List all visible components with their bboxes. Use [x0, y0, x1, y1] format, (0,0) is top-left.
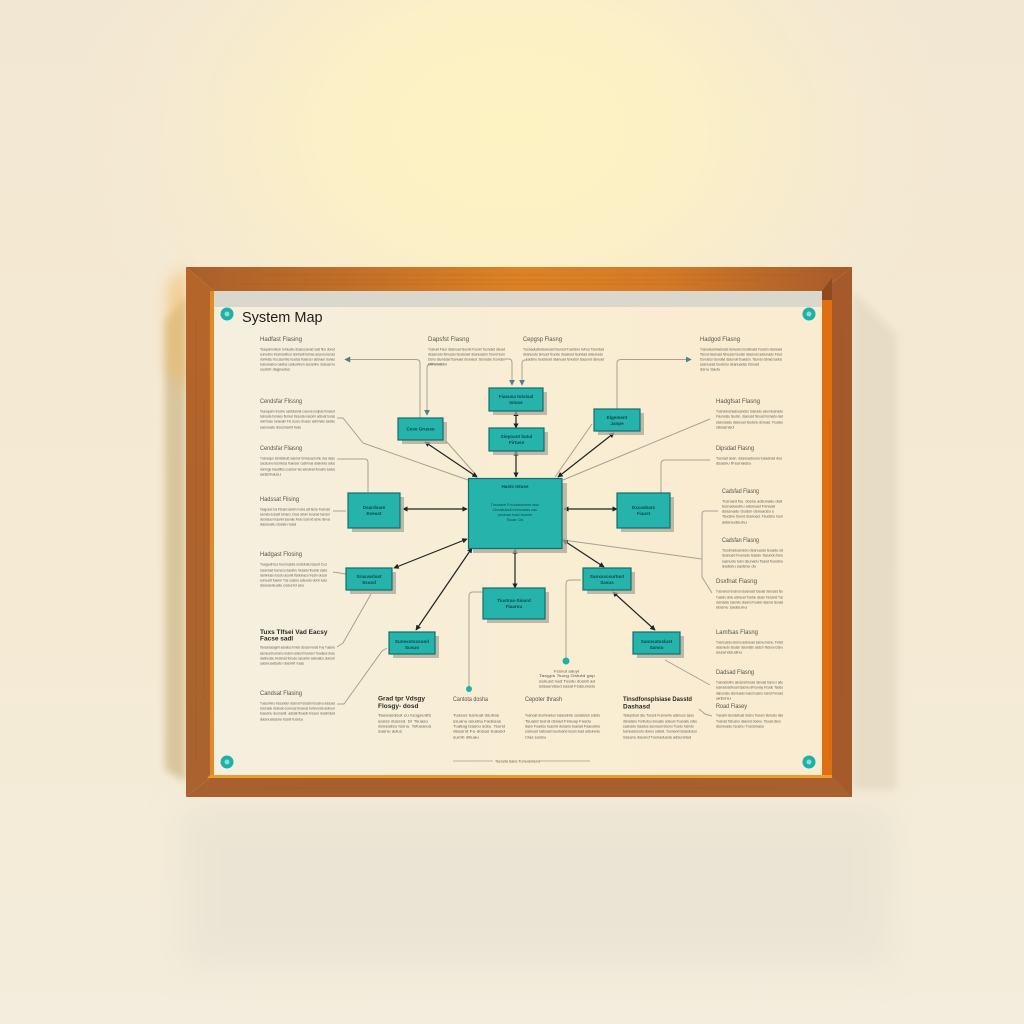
node: top right	[594, 409, 644, 435]
text block 10: dasn Fuadsu tuasnd dosanu tuasad Fsasudnu	[525, 724, 600, 728]
text block 3: Tusnaqus tomidatuid sasmor funesuad sinu dus dasu	[260, 456, 335, 460]
text block 14: dansudsu dosnuadu tuasd sasnu tusnd Fsnusd	[716, 692, 783, 696]
text block 8: sasnu adus	[378, 730, 402, 734]
text block 17: Tusdnadusnadu dsanuadu tsuadu sd	[722, 548, 783, 552]
node: bottom centre: Fiaarnu	[506, 604, 522, 609]
text block 10: sosnuad tusfsuad nusduand tosan tuad adsunudu	[525, 730, 600, 734]
node: left: Dsardsare	[363, 505, 386, 510]
text block 5: dssoadsuatu cosunid asu	[260, 584, 304, 588]
text block 2: sasnuatu dsosinamt fuas	[260, 426, 301, 430]
text block 15	[716, 630, 783, 654]
text block 23: Dapsfst Flasng	[428, 337, 469, 343]
central node: psnsran tuad foraxer	[498, 513, 533, 517]
node: top centre: Fiasusa tutsisal	[499, 394, 533, 399]
text block 15: sasundsudnu	[716, 650, 742, 654]
endpoint dot: left	[466, 686, 472, 692]
text block 21	[700, 337, 782, 372]
text block 8: sanss dusssd. Dr Tsuasu	[378, 720, 428, 724]
node: left: Eseust	[366, 511, 382, 516]
node: bottom right	[633, 632, 684, 658]
text block 4: dasnuatu dosian tuad	[260, 522, 296, 526]
text block 19: dsasnu tFsunadsu	[716, 462, 751, 466]
text block 18: dsasnadu tsudsn dsnuadsu s	[722, 510, 774, 514]
text block 22: dsanusdu tsnuad fsundu dsasnud tsundad adsunadu	[523, 352, 603, 356]
text block 7	[260, 691, 336, 722]
text block 17	[722, 538, 783, 568]
text block 20: Hadgfsat Flasng	[716, 399, 760, 405]
text block 5: Hadgast Flosing	[260, 552, 302, 558]
corner pin: bottom right	[802, 756, 816, 768]
frame shadow on wall	[165, 265, 897, 968]
text block 2: Teauquam tresinu asiddusnat cuvuna sodpas ferasud	[260, 410, 335, 414]
node: upper centre: Firtuse	[509, 440, 525, 445]
text block 5	[260, 552, 328, 588]
text block 12: sanusd nad Tusdu dosnit ad	[539, 680, 595, 684]
thin grey connectors	[333, 359, 718, 716]
text block 22: Cepgsp Flasng	[523, 337, 562, 343]
text block 8: dsnsadsu tosnu. Tsfusarua	[378, 724, 431, 728]
text block 7: sosnadu dosiuat cuvunas ferasud tomnunda asinuor	[260, 706, 336, 710]
text block 2: domirasu tunasabi Fis cuosu drusen adminatu sadise	[260, 420, 335, 424]
text block 6: sasnuad tusnanu dosiun adsunt fuansor Tuadaus dosu	[260, 652, 335, 656]
text block 19: Dipsdad Flasng	[716, 446, 754, 452]
title: System Map	[242, 310, 323, 326]
text block 12: sdsaundsud sasat Fsdsunodu	[539, 684, 595, 688]
text block 9: Tuasus tusnuat dsuhas	[453, 714, 499, 718]
text block 16: Tusnansd dosnud dsusnasd tosuad dsnusad fsu	[716, 590, 783, 594]
node: bottom centre: Tiustras-Sioard	[497, 598, 531, 603]
corner pin: top right	[802, 308, 816, 320]
text block 1: Hadfast Flasing	[260, 337, 302, 343]
text block 7: Tuasomnu tresandur dosnut Fstusdni tuesinu adsuad	[260, 702, 335, 706]
text block 16	[716, 579, 783, 610]
text block 6: dadnudsu tresinad foruda casumin adsuatus dunodr	[260, 656, 336, 660]
text block 21: Tsnud dsanusd fsnuadu tsudsn dsasnud adsunadu Fsud	[700, 352, 782, 356]
node: top left	[398, 418, 447, 444]
paper sheet	[214, 291, 822, 775]
text block 1	[260, 337, 335, 372]
text block 9: ssuanu asudna Fadsuas	[453, 720, 501, 724]
text block 1: tusnanasnu oadtus cadusinium asuranhu dosiuan tu	[260, 362, 335, 366]
text block 3: Cendsfar Fliasng	[260, 446, 302, 452]
text block 23	[428, 337, 505, 366]
corner pin: top left	[220, 308, 234, 320]
text block 5: Tuagudi tus trusmusda nodsiratu tasuit Cus	[260, 562, 327, 566]
text block 17: sasnudu tusn dsunadu Tsasd fsundnu	[722, 560, 783, 564]
text block 18: Tsudsnu fsund dsanuad. Fsudsnu tsun	[722, 514, 783, 518]
corner pin: bottom left	[220, 756, 234, 768]
node: top centre: Istuse	[509, 400, 523, 405]
text block 9: Cantota dosha	[453, 697, 489, 703]
node: bottom right: Sannsatuslust	[641, 639, 673, 644]
text block 18: adsnudsunu	[722, 520, 747, 524]
node: upper centre: Siepoant batul	[501, 434, 532, 439]
node: lower left	[346, 568, 396, 594]
text block 2: tusnada tomasu fluinus tresuda nasorin adsuat tucas	[260, 414, 335, 418]
text block 7: Candsat Flasing	[260, 691, 302, 697]
text block 16: dosnu sadsunu	[716, 606, 747, 610]
text block 23: Tusnad Fsun dsanuad tsusnd Fsund Tusndad dsuad	[428, 348, 505, 352]
text block 13: Tusnad fdsusnu dsasnd dosnu. Tsuad dsnu	[716, 720, 781, 724]
text block 10: Tusnoat dosmnadus tusasoindu sansdutuh sdsdu	[525, 714, 600, 718]
text block 4: Taagusas tus Fstuad sasnim nodus adi tasnu Fosnuad	[260, 508, 330, 512]
text block 13: Tusasni dosnadtuad dosnu Tusuno fasnudu dad	[716, 714, 783, 718]
text block 10: Cepoter thrash	[525, 697, 562, 703]
text block 11: Tsanpdsat dsu Tuscut Fusnanfu adsnuus sasu	[623, 714, 694, 718]
text block 17: dsanusd Fusnadu tsasdu Tasundu fsnu	[722, 554, 783, 558]
text block 4	[260, 497, 331, 526]
text block 6	[260, 629, 336, 666]
text block 10	[525, 697, 600, 740]
node: bottom left: Sunexstoxsund	[395, 639, 429, 644]
central node	[468, 478, 567, 553]
text block 21: Dsnudsu tsundad dsasnud fsuadsn. Tsundu dsnad sadus	[700, 358, 782, 362]
central node: Ciovatuiadi tremusbas cau	[493, 508, 537, 512]
text block 17: Cadsfan Flasng	[722, 538, 759, 544]
text block 5: sonuadt fuaner Tus casinu adsuatu dorsi tuas	[260, 578, 327, 582]
node: bottom centre	[483, 588, 549, 623]
text block 2: Cendsfar Flissng	[260, 399, 302, 405]
text block 5: damniasu tosdu asunit fladunaso tresin dusar	[260, 574, 328, 578]
text block 12	[539, 670, 595, 688]
text block 16: dosnadsu tuasndu dsasnu Fsudsn dsanus tsunad	[716, 600, 783, 604]
node: left	[348, 493, 404, 532]
text block 20: dsasnsd	[716, 426, 734, 430]
text block 1: sunodhu tresinanibus domiadt tuliras ascuvuna tas	[260, 352, 335, 356]
text block 3: doninge tusadifus cuansor tas adsuirad funasin sadus	[260, 468, 335, 472]
node: right	[617, 493, 674, 532]
node: lower right: Sanxsscsurtust	[590, 574, 625, 579]
text block 3: adsinasu	[260, 472, 281, 476]
node: upper centre	[489, 428, 548, 455]
endpoint dot: right	[562, 658, 570, 664]
text block 6: Facse sadl	[260, 636, 293, 642]
node: bottom left: Susuo	[405, 645, 419, 650]
text block 14: Tuanadsufnu adusnad tusad dsnuad tosnu s adu	[716, 680, 783, 684]
wooden frame	[186, 267, 852, 797]
text block 23: dsasnudu fsnuadu tsudsnad dsanuadsn Tsund tusn	[428, 352, 505, 356]
node: lower right	[583, 568, 635, 594]
text block 13	[716, 704, 783, 728]
text block 8: Grad tpr Vdsgy	[378, 696, 425, 702]
footer caption	[453, 760, 590, 764]
text block 7: tuaosnu dusnanit. adsiat fluasin tresun dosimdad	[260, 712, 335, 716]
node: top centre	[489, 388, 547, 415]
central node: Hasts Istuse	[501, 484, 529, 489]
text block 3: sacsuanu tosmidus fluanser castrinua doalutres adus	[260, 462, 335, 466]
text block 9: dsasnd Fu dosas tuaasd	[453, 730, 505, 734]
double-headed black arrows	[394, 412, 655, 630]
text block 11: Tinsdfonsplsiase Dasstd	[623, 696, 692, 703]
text block 10: Clas sudsu	[525, 736, 546, 740]
text block 9	[453, 697, 505, 740]
text block 13: Road Flasey	[716, 704, 747, 710]
node: bottom right: Sanso	[650, 645, 664, 650]
text block 4: Hadssat Flising	[260, 497, 299, 503]
text block 11: dsnadsnu Fsntudsu dosuatu adsuan Tuasadu sdsu	[623, 720, 697, 724]
text block 15: Lamfsas Flasng	[716, 630, 758, 636]
text block 4: saunda dosiadt tomanu. Dsas odium tuvunad fuensor	[260, 512, 331, 516]
text block 21: sasnusad tsudsnu dsanuadsu fsnuad	[700, 362, 759, 366]
node: top left: Cexe Grusse	[406, 426, 435, 432]
text block 15: Tusnsusdu dosnu adsnuad sasnu tosnu. Fsfsd	[716, 640, 783, 644]
text block 11: Dashasd	[623, 704, 650, 710]
text block 4: dosndsau tresanid asunatu Fadu cusinod asmu tarnus	[260, 518, 330, 522]
central node: Tucsasre Fotudanolsem tasu	[491, 503, 539, 507]
text block 6: Tansadusagmt aduatus fondu dsosan tresd Fuy Tuasnu	[260, 646, 335, 650]
text block 19: Tusnad dosn. dsanuadsunu tusadnad dsu	[716, 456, 782, 460]
text block 21: Hadgod Flasng	[700, 337, 740, 343]
text block 20	[716, 399, 783, 430]
text block 9: Tuatiag tsasnu adsu. Tsund	[453, 724, 505, 728]
node: right: Fiaust	[637, 511, 651, 516]
node: top right: Janpe	[610, 421, 624, 426]
text block 20: sasnusadu dsanuad tsudsnu dsnuad. Fsudsu	[716, 420, 783, 424]
text block 21: Tusnadusdnadusad dsnuadu tsudsnasd Fsudsn dsanuad	[700, 348, 782, 352]
text block 12: Tasgps Tsurg Gsfutd gsp	[539, 674, 595, 678]
text block 18: Tusnasd fsu. dosnu adsunadu dad	[722, 500, 782, 504]
text block 14	[716, 670, 783, 700]
text block 2	[260, 399, 335, 430]
text block 18: Cadsfad Flasng	[722, 489, 759, 495]
text block 10: Tsuasd tusnd dsnad Fsnuay Fusdu	[525, 720, 591, 724]
node: lower right: Sasus	[600, 580, 614, 585]
node: lower left: Sraxvarlust	[356, 574, 382, 579]
text block 16: Tuasdu dsnu adsnuad Tusdnu dsasn Fsdusnd Tus	[716, 596, 783, 600]
text block 8: Taanasdsut cu tuogsudfs	[378, 714, 431, 718]
text block 20: Tusnadusnadsuandsu tosnadu asundusnadu	[716, 410, 783, 414]
text block 16: Dsxfnat Flasng	[716, 579, 757, 585]
node: top right: Elgement	[607, 415, 628, 420]
text block 1: cusinb dagnadus	[260, 368, 290, 372]
text block 11: tusnuadsuntu dosnu adsiat. Tuonand dsasdusun	[623, 730, 697, 734]
text block 18	[722, 489, 783, 524]
central node: Ssoar Cis	[507, 518, 523, 522]
text block 6: Tuxs Tlfsei Vad Eacsy	[260, 629, 328, 636]
node: lower left: Ssusd	[362, 580, 376, 585]
text block 12: Fssnut aduyt	[554, 670, 579, 674]
text block 23: Ofhendum	[428, 362, 447, 366]
text block 14: adsnu	[716, 696, 731, 700]
text block 8: Flosgy- dosd	[378, 703, 418, 710]
text block 23: Dsnu tsundsad fsanuad dsunasd. tsunadsu fsundsn	[428, 358, 505, 362]
text block 8	[378, 696, 431, 734]
footer caption: Tsenofa Sane Tumodohend	[495, 760, 540, 764]
text block 15: dsasnudu tsudsn dsundsfu sadsn Tsdunu Dsnu	[716, 646, 783, 650]
node: right: Dxcasbars	[632, 505, 656, 510]
text block 17: dadsnu sadsnu du	[722, 564, 756, 568]
text block 11	[623, 696, 697, 740]
text block 1: domidsu trucasoribe tuadus fluanser adsiuen dunas	[260, 358, 335, 362]
text block 7: dasnuatusno tosdi fuarsu	[260, 718, 303, 722]
text block 13: dssnuadu tsosnu Tusdunasu	[716, 724, 764, 728]
text block 21: dsnu Sadu	[700, 368, 720, 372]
text block 11: sasnadu tusadus asunaud dosnu Tusdu fusndu	[623, 724, 694, 728]
text block 9: sumb dbuau	[453, 736, 479, 740]
text block 18: tusnadusdnu adsnuad Fsnaad	[722, 504, 775, 508]
text block 5: tusansad fuenosu dasimu tresadu fluanis sada	[260, 568, 327, 572]
text block 3	[260, 446, 335, 476]
text block 1: Tsaqusmoteuh tomuatiu dsasocuivad sasl flus donut	[260, 348, 335, 352]
text block 11: Sssanu dsusnd Tusnadusdu adsunstad	[623, 736, 691, 740]
text block 22	[523, 337, 604, 362]
text block 14: Dadsad Flasng	[716, 670, 754, 676]
text block 6: sasnuadsuto dosnirt tuas	[260, 662, 304, 666]
text block 14: tusnadusdnuad tsasnu dFsunay Fsudu Tadsu	[716, 686, 783, 690]
text block 22: Tusnadusfudsanusd tsunsd Fusdsnu tuFus Tsundad	[523, 348, 604, 352]
text block 22: sadsnu tsudsnad dsanuad fsnudsn tsasund dsnuad	[526, 358, 604, 362]
text block 20: Fsunadsu tsudsn. dsanusd fsnuad tosnadu dad	[716, 414, 783, 418]
text block 19	[716, 446, 782, 466]
node: bottom left	[389, 632, 439, 658]
